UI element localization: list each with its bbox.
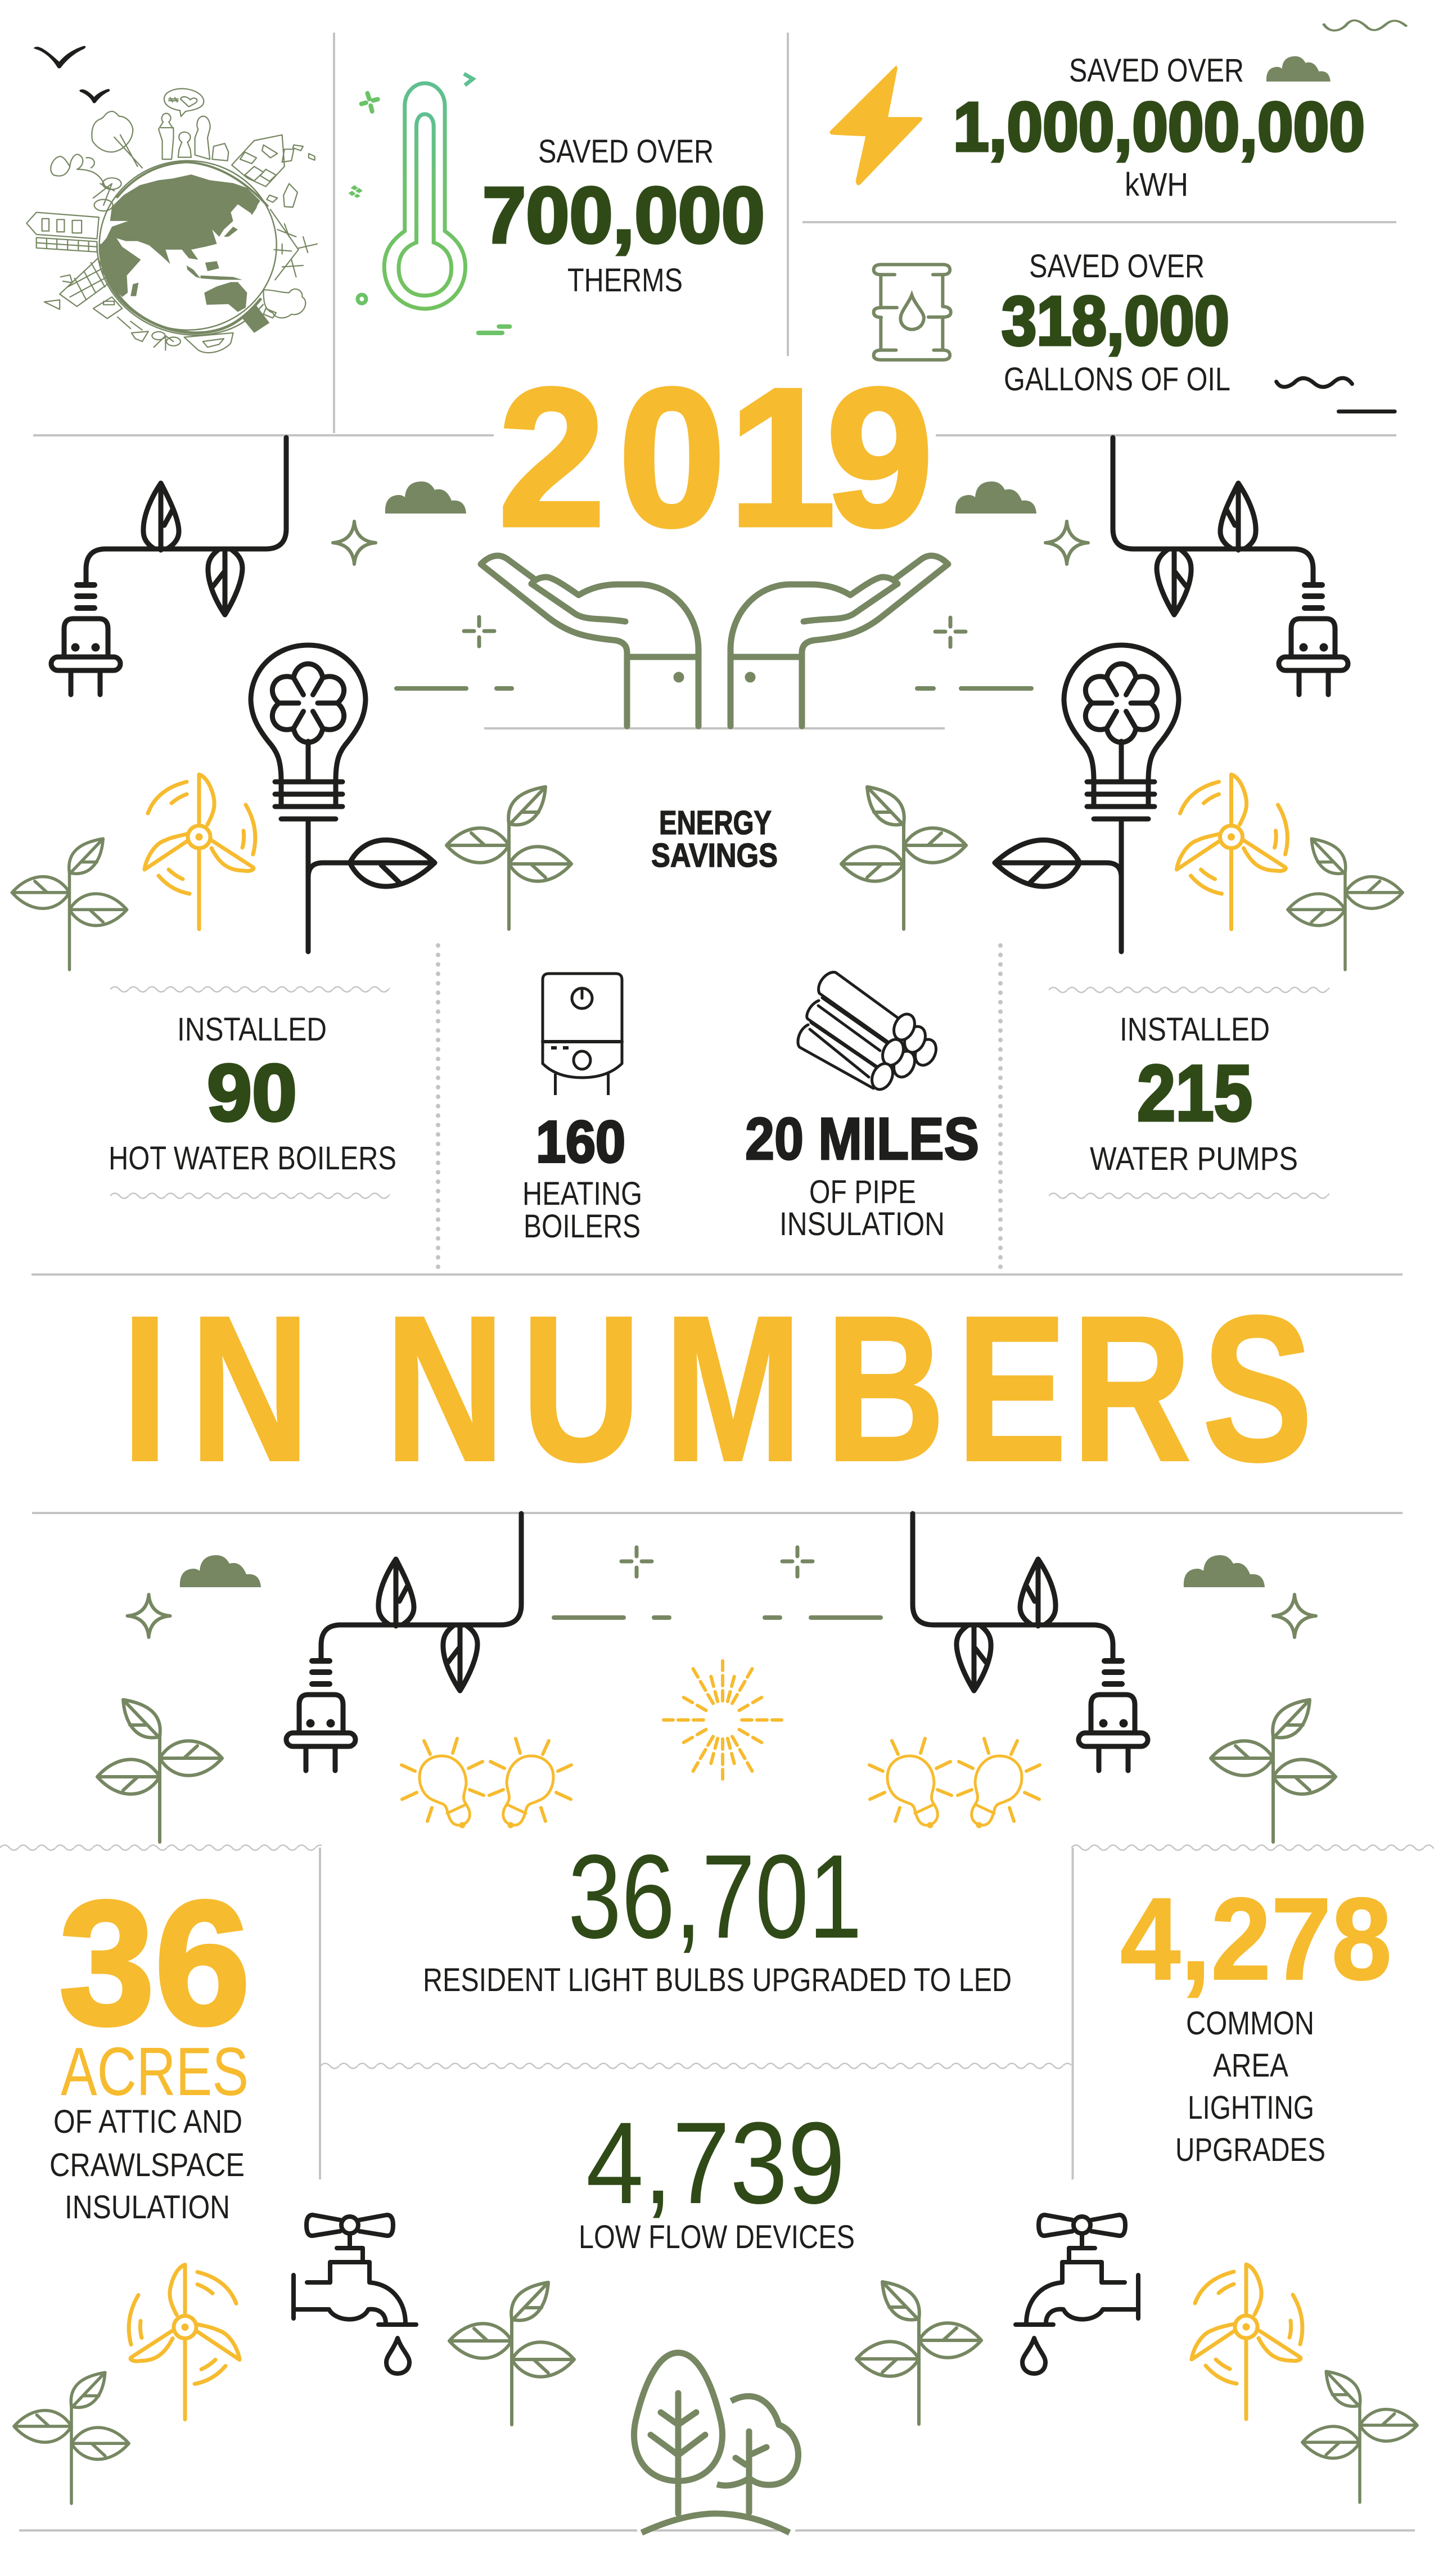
panel: globe illustration (26, 46, 317, 353)
icon: black squiggle and dash (1277, 378, 1395, 412)
panel: hot water boilers: 90 (207, 1048, 297, 1138)
icon: oil barrel (874, 264, 951, 360)
icon: plant lower left (97, 1700, 222, 1842)
panel: kWh saved (829, 20, 1406, 203)
panel: pipe insulation: 20 MILES (745, 1106, 979, 1172)
panel: hot water boilers (109, 1011, 396, 1177)
panel: common area lighting: UPGRADES (1175, 2132, 1325, 2168)
panel: common area lighting: COMMON (1186, 2005, 1314, 2042)
title: 2019: 2019 (498, 348, 934, 568)
panel: attic insulation: ACRES (61, 2033, 249, 2110)
icon: lower cord left (286, 1514, 521, 1771)
icon: dashes (396, 686, 1031, 691)
icon: plant right (841, 787, 966, 929)
panel: therms saved (348, 74, 765, 333)
panel: common area lighting: LIGHTING (1188, 2089, 1314, 2126)
icon: small bulbs right pair (869, 1739, 1040, 1827)
icon: faucet right (1016, 2215, 1138, 2374)
panel: led bulbs (423, 1830, 1012, 1998)
icon: caring hands (481, 556, 948, 726)
icon: small bulbs left pair (402, 1739, 571, 1827)
icon: lower cloud left (180, 1555, 261, 1587)
icon: sunburst (664, 1661, 782, 1779)
icon: lower dashes (554, 1615, 881, 1620)
heading: energy savings: ENERGY (659, 804, 772, 841)
icon: lightbulb left (251, 645, 435, 952)
icon: lower star right (1273, 1595, 1316, 1637)
text: saved over gallons: 318,000 (1002, 283, 1229, 360)
icon: lower sparkle left (621, 1547, 652, 1577)
icon: cloud left (385, 481, 466, 514)
text: saved over kwh: kWH (1125, 166, 1188, 203)
icon: star right (1045, 521, 1088, 564)
icon: star left (333, 521, 376, 564)
icon: plant bottom far right (1302, 2371, 1417, 2502)
icon: wind turbine lower right (1192, 2264, 1302, 2419)
icon: lightning bolt (829, 66, 922, 185)
icon: thermometer (348, 74, 509, 333)
icon: green squiggle (1324, 20, 1406, 30)
text: saved over kwh: 1,000,000,000 (953, 89, 1365, 166)
icon: faucet left (294, 2215, 416, 2374)
icon: plant lower right (1211, 1700, 1336, 1842)
text: saved over therms: 700,000 (482, 170, 765, 259)
panel: attic insulation: INSULATION (65, 2189, 230, 2226)
panel: heating boilers: 160 (536, 1109, 625, 1175)
panel: water pumps: 215 (1137, 1048, 1252, 1137)
panel: attic insulation: 36 (59, 1865, 250, 2061)
text: saved over therms: THERMS (567, 262, 683, 299)
panel: pipe insulation (745, 972, 979, 1242)
icon: birds (34, 46, 110, 103)
panel: common area lighting: 4,278 (1120, 1874, 1392, 2005)
icon: sparkle right (935, 618, 966, 647)
icon: plant far left (12, 839, 127, 970)
panel: common area lighting: AREA (1213, 2047, 1288, 2084)
text: saved over therms: SAVED OVER (538, 133, 714, 170)
icon: plant bottom right (856, 2282, 981, 2424)
heading: energy savings (651, 804, 778, 874)
icon: continents (99, 174, 260, 312)
icon: stacked pipes (798, 972, 940, 1093)
panel: hot water boilers: INSTALLED (177, 1011, 327, 1048)
panel: oil saved (874, 248, 1395, 412)
text: saved over gallons (1002, 248, 1230, 398)
panel: pipe insulation: INSULATION (779, 1206, 945, 1242)
icon: plant left (447, 787, 571, 929)
icon: laptop (242, 305, 269, 333)
text: saved over kwh: SAVED OVER (1069, 52, 1244, 89)
text: saved over kwh (953, 52, 1365, 203)
panel: heating boilers (522, 974, 642, 1245)
panel: led bulbs: 36,701 (568, 1830, 862, 1963)
panel: heating boilers: HEATING (522, 1176, 642, 1212)
panel: low flow devices: LOW FLOW DEVICES (579, 2219, 855, 2255)
icon: lower star left (127, 1595, 170, 1637)
panel: common area lighting (1120, 1874, 1392, 2168)
icon: lightbulb right (995, 645, 1179, 952)
icon: sparkle left (464, 617, 494, 646)
icon: cloud right (955, 481, 1036, 514)
icon: trees on hill (634, 2353, 798, 2535)
title: in numbers: IN NUMBERS (122, 1272, 1313, 1504)
panel: water pumps (1090, 1011, 1298, 1177)
panel: water pumps: INSTALLED (1120, 1011, 1270, 1048)
panel: hot water boilers: HOT WATER BOILERS (109, 1140, 396, 1177)
wavy dividers (0, 986, 1434, 2069)
panel: attic insulation: OF ATTIC AND (53, 2104, 242, 2140)
icon: plant bottom far left (14, 2372, 129, 2503)
panel: heating boilers: BOILERS (524, 1208, 641, 1245)
icon: globe ring (97, 161, 277, 335)
icon: cord and plug right (1113, 438, 1348, 695)
text: saved over gallons: SAVED OVER (1029, 248, 1205, 285)
text: saved over gallons: GALLONS OF OIL (1004, 361, 1230, 398)
panel: low flow devices: 4,739 (586, 2098, 845, 2228)
icon: lower cord right (913, 1514, 1148, 1771)
icon: wind turbine right (1176, 774, 1287, 929)
heading: energy savings: SAVINGS (651, 837, 778, 874)
panel: attic insulation: CRAWLSPACE (49, 2147, 245, 2183)
icon: cord and plug left (51, 438, 286, 695)
icon: wind turbine left (145, 774, 255, 929)
panel: water pumps: WATER PUMPS (1090, 1141, 1298, 1177)
panel: attic insulation (49, 1865, 250, 2226)
icon: lower sparkle right (782, 1547, 813, 1577)
icon: plant bottom left (449, 2282, 574, 2425)
icon: boiler (543, 974, 622, 1095)
dotted dividers (438, 945, 1000, 1276)
icon: doodles around globe (26, 89, 317, 353)
panel: pipe insulation: OF PIPE (809, 1174, 916, 1210)
icon: plant far right (1288, 839, 1403, 970)
icon: small cloud (1266, 56, 1331, 82)
icon: wind turbine lower left (129, 2264, 240, 2420)
text: saved over therms (482, 133, 765, 299)
icon: lower cloud right (1184, 1555, 1265, 1587)
panel: led bulbs: RESIDENT LIGHT BULBS UPGRADED TO LED (423, 1962, 1012, 1998)
